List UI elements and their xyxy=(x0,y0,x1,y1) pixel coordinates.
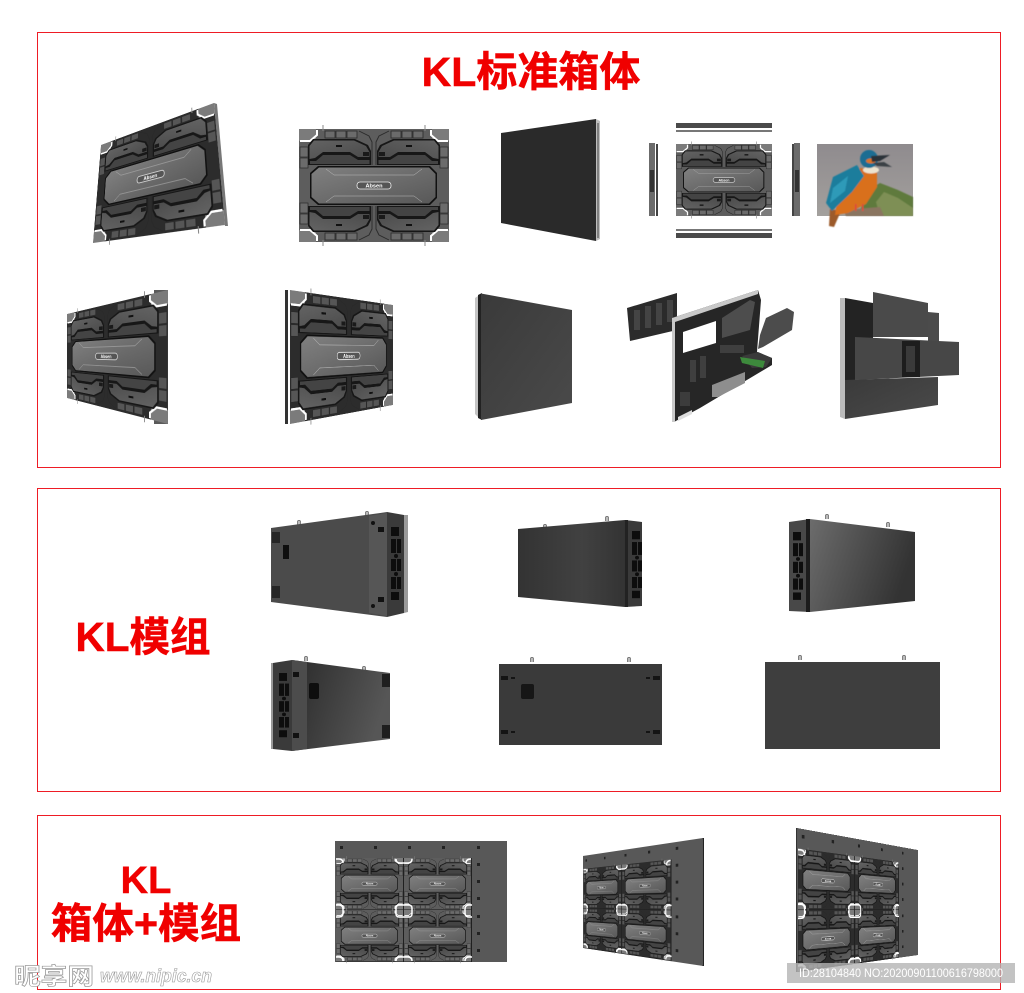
cabinet rear angled right narrow xyxy=(290,288,393,425)
corner tabs for left-angled rear view xyxy=(154,290,168,424)
watermark: image ID band: ID:28104840 NO:20200901100616798000 xyxy=(799,968,1003,980)
cabinet screen side angled view xyxy=(475,293,572,420)
module rear angled right xyxy=(271,656,390,751)
watermark: site logo: 昵享网 xyxy=(14,963,94,989)
heading: KL: KL xyxy=(121,860,171,902)
module front angled left xyxy=(518,516,642,607)
module rear straight-on xyxy=(499,657,662,745)
cabinet wall rear straight-on xyxy=(335,841,507,963)
cabinet rear straight-on view xyxy=(299,125,449,246)
title: KL standard cabinet: KL标准箱体 xyxy=(422,49,640,95)
module rear angled left xyxy=(271,511,408,617)
panel: KL standard cabinet xyxy=(37,32,1001,468)
panel: KL cabinet plus module xyxy=(37,815,1001,990)
cabinet wall angled right xyxy=(797,828,918,972)
dark edge of right-angled wall xyxy=(796,828,798,972)
watermark: image ID band xyxy=(787,963,1015,983)
cabinet wall angled left xyxy=(583,838,703,966)
cabinet rear angled left narrow xyxy=(67,290,168,424)
photo: kingfisher on mossy branch xyxy=(817,144,913,227)
watermark: site logo: www.nipic.cn xyxy=(100,966,212,986)
module front angled right xyxy=(789,514,915,612)
module front straight-on xyxy=(765,655,940,749)
exploded cabinet with modules removed xyxy=(627,290,794,422)
heading: cabinet plus module: 箱体+模组 xyxy=(51,900,241,947)
cabinet front screen angled xyxy=(501,119,600,241)
watermark: site logo xyxy=(14,963,212,989)
exploded cabinet side views xyxy=(649,123,800,238)
panel: KL module xyxy=(37,488,1001,792)
heading: KL module: KL模组 xyxy=(76,614,210,660)
dark edge of angled wall xyxy=(702,838,704,966)
cabinet side rail for right-angled rear view xyxy=(285,290,288,424)
cabinet rear angled up-right xyxy=(93,103,225,245)
cabinet silver edge for angled rear view xyxy=(214,103,228,226)
cabinet partially covered with screen modules xyxy=(840,292,959,419)
